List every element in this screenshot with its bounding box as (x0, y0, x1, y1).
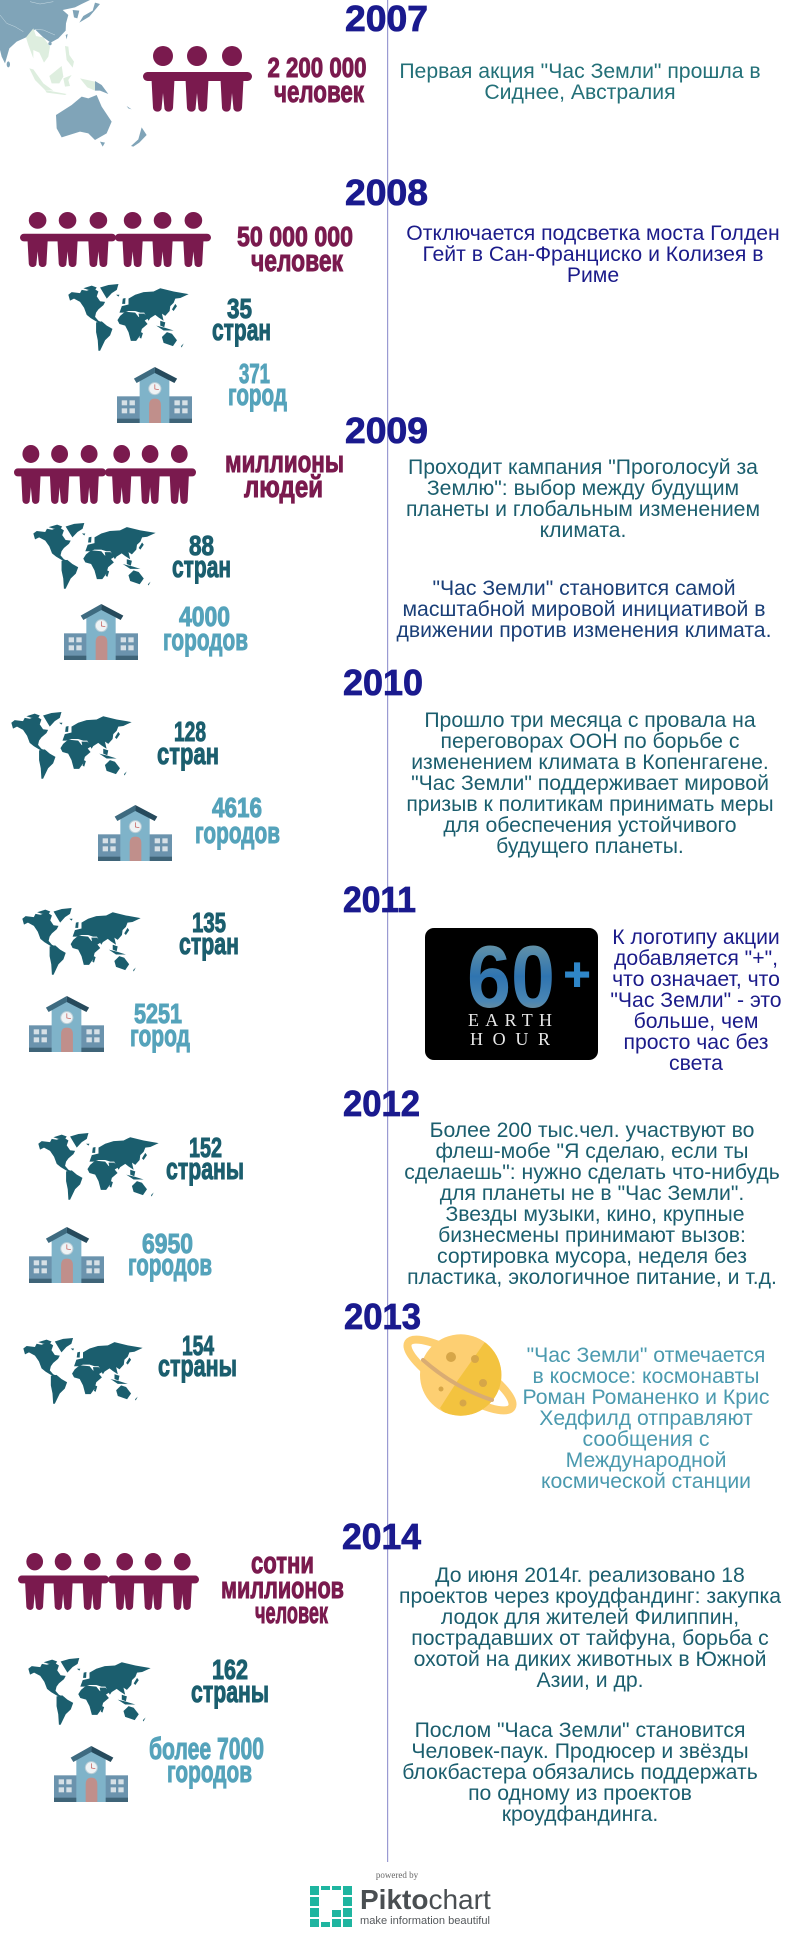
2013 section (23, 1296, 770, 1493)
countries 2013 (158, 1330, 237, 1383)
text 2011 (610, 926, 782, 1075)
text 2009 second (397, 577, 771, 642)
cities 2011 (130, 998, 190, 1053)
text 2013 (523, 1344, 770, 1493)
cities 2014: более 7000 (149, 1731, 264, 1766)
text 2012: бизнесмены принимают вызов: (438, 1224, 746, 1247)
text 2009 first (406, 456, 760, 542)
map of Asia-Pacific (0, 0, 147, 147)
countries 2009: 88 (189, 530, 214, 561)
countries 2008: 35 (227, 293, 252, 324)
year 2009: 2009 (345, 410, 428, 451)
people count 2014 (221, 1545, 344, 1630)
text 2012: Звезды музыки, кино, крупные (445, 1203, 745, 1226)
cities 2012: городов (128, 1247, 212, 1282)
text 2014 second: Человек-паук. Продюсер и звёзды (411, 1740, 749, 1763)
cities 2012: 6950 (142, 1228, 193, 1259)
cities 2008 (228, 358, 287, 412)
cities 2010: городов (195, 815, 280, 850)
text 2011: "Час Земли" - это (610, 989, 782, 1012)
powered by: powered by (376, 1870, 419, 1880)
text 2008: Гейт в Сан-Франциско и Колизея в (422, 243, 764, 266)
people count 2008: человек (251, 243, 343, 278)
countries 2011 (179, 907, 239, 961)
text 2011: больше, чем (634, 1010, 758, 1033)
year 2013: 2013 (344, 1296, 421, 1337)
cities 2011: 5251 (134, 998, 182, 1029)
text 2007 (399, 60, 761, 104)
text 2014 first: пострадавших от тайфуна, борьба с (411, 1627, 769, 1650)
year 2011: 2011 (343, 879, 416, 920)
text 2012: для планеты не в "Час Земли". (440, 1182, 744, 1205)
countries 2008 (212, 293, 271, 347)
countries 2011: 135 (192, 907, 226, 938)
text 2014 second: блокбастера обязались поддержать (402, 1761, 758, 1784)
text 2009 first: Проходит кампания "Проголосуй за (408, 456, 758, 479)
Earth Hour 60+ logo: HOUR (470, 1029, 550, 1049)
people count 2008 (237, 221, 353, 278)
text 2008: Отключается подсветка моста Голден (406, 222, 780, 245)
text 2014 second: по одному из проектов (468, 1782, 692, 1805)
people count 2007: человек (274, 74, 364, 109)
icon: world map (68, 284, 189, 351)
Piktochart footer (310, 1870, 491, 1927)
text 2010: Прошло три месяца с провала на (424, 709, 756, 732)
text 2009 second: масштабной мировой инициативой в (402, 598, 766, 621)
text 2013: Международной (566, 1449, 726, 1472)
text 2009 first: климата. (540, 519, 626, 542)
text 2007: Первая акция "Час Земли" прошла в (399, 60, 761, 83)
timeline line (387, 0, 388, 1862)
cities 2014 (149, 1731, 264, 1789)
text 2007: Сиднее, Австралия (484, 81, 676, 104)
text 2010: изменением климата в Копенгагене. (411, 751, 769, 774)
text 2010 (406, 709, 774, 858)
text 2013: Хедфилд отправляют (539, 1407, 753, 1430)
icon: building (29, 1227, 104, 1283)
icon: world map (38, 1133, 159, 1200)
text 2012: флеш-мобе "Я сделаю, если ты (435, 1140, 749, 1163)
people count 2009: миллионы (225, 444, 344, 479)
countries 2009: стран (172, 549, 231, 584)
text 2010: призыв к политикам принимать меры (406, 793, 774, 816)
text 2014 second: кроудфандинга. (502, 1803, 658, 1826)
countries 2012 (166, 1132, 244, 1186)
tagline: make information beautiful (360, 1915, 490, 1927)
2008 section (20, 172, 780, 423)
Earth Hour 60+ logo: EARTH (468, 1010, 552, 1030)
people count 2014: миллионов (221, 1570, 344, 1605)
text 2014 first: лодок для жителей Филиппин, (441, 1606, 739, 1629)
people count 2014: человек (255, 1595, 328, 1630)
icon: world map (22, 908, 141, 975)
icon: people group (18, 1553, 199, 1610)
text 2011: просто час без (623, 1031, 769, 1054)
text 2013: "Час Земли" отмечается (527, 1344, 765, 1367)
text 2014 second (402, 1719, 758, 1826)
text 2009 second: движении против изменения климата. (397, 619, 771, 642)
countries 2010: 128 (174, 716, 206, 747)
icon: building (54, 1746, 128, 1802)
countries 2014: страны (191, 1674, 269, 1709)
text 2013: космической станции (541, 1470, 751, 1493)
icon: world map (11, 712, 132, 779)
text 2008: Риме (567, 264, 619, 287)
countries 2011: стран (179, 926, 239, 961)
year 2014: 2014 (342, 1516, 421, 1557)
text 2014 first (399, 1564, 781, 1692)
countries 2013: 154 (182, 1330, 214, 1361)
text 2009 first: планеты и глобальным изменением (406, 498, 760, 521)
countries 2009 (172, 530, 231, 584)
people count 2009 (225, 444, 344, 504)
text 2012: Более 200 тыс.чел. участвуют во (430, 1119, 754, 1142)
text 2013: сообщения с (582, 1428, 710, 1451)
text 2010: "Час Земли" поддерживает мировой (411, 772, 769, 795)
Earth Hour 60+ logo: + (564, 948, 590, 1000)
people count 2008: 50 000 000 (237, 221, 353, 252)
text 2011: К логотипу акции (612, 926, 780, 949)
countries 2013: страны (158, 1348, 237, 1383)
text 2008 (406, 222, 780, 287)
cities 2011: город (130, 1018, 190, 1053)
year 2008: 2008 (345, 172, 428, 213)
cities 2009: 4000 (179, 601, 230, 632)
year 2012: 2012 (343, 1083, 420, 1124)
cities 2014: городов (167, 1754, 252, 1789)
text 2010: будущего планеты. (496, 835, 684, 858)
text 2012: сделаешь": нужно сделать что-нибудь (404, 1161, 780, 1184)
icon: world map (28, 1658, 151, 1725)
text 2009 second: "Час Земли" становится самой (432, 577, 736, 600)
Piktochart wordmark: Piktochart (360, 1884, 491, 1915)
text 2014 first: Азии, и др. (536, 1669, 644, 1692)
text 2013: в космосе: космонавты (533, 1365, 759, 1388)
people count 2009: людей (244, 469, 323, 504)
text 2011: света (669, 1052, 723, 1075)
cities 2012 (128, 1228, 212, 1282)
icon: people (143, 46, 252, 112)
countries 2010: стран (157, 736, 219, 771)
Earth Hour 60+ logo: 60 (467, 927, 555, 1026)
text 2012 (404, 1119, 780, 1289)
text 2014 first: До июня 2014г. реализовано 18 (435, 1564, 745, 1587)
countries 2008: стран (212, 312, 271, 347)
icon: people group (14, 445, 196, 504)
2010 section (11, 662, 774, 861)
cities 2010: 4616 (212, 792, 262, 823)
people count 2014: сотни (251, 1545, 314, 1580)
2011 section (22, 879, 782, 1075)
text 2012: сортировка мусора, неделя без (437, 1245, 747, 1268)
icon: people group (20, 212, 211, 267)
people count 2007: 2 200 000 (268, 52, 366, 83)
text 2014 second: Послом "Часа Земли" становится (415, 1719, 745, 1742)
2009 section (14, 410, 771, 660)
icon: planet (403, 1334, 517, 1416)
text 2011: что означает, что (612, 968, 780, 991)
text 2014 first: охотой на диких животных в Южной (414, 1648, 766, 1671)
year 2010: 2010 (343, 662, 423, 703)
icon: world map (23, 1338, 143, 1404)
cities 2008: город (228, 377, 287, 412)
countries 2014: 162 (212, 1654, 248, 1685)
text 2013: Роман Романенко и Крис (523, 1386, 770, 1409)
countries 2012: страны (166, 1151, 244, 1186)
text 2009 first: Землю": выбор между будущим (427, 477, 739, 500)
icon: building (98, 805, 172, 861)
2007 section (143, 0, 761, 112)
icon: building (117, 367, 192, 423)
people count 2007 (268, 52, 366, 109)
Earth Hour 60+ logo (425, 927, 598, 1060)
cities 2009: городов (163, 622, 248, 657)
icon: building (29, 996, 104, 1052)
icon: Piktochart logo (310, 1886, 352, 1927)
countries 2012: 152 (189, 1132, 222, 1163)
text 2014 first: проектов через кроудфандинг: закупка (399, 1585, 781, 1608)
cities 2008: 371 (239, 358, 270, 389)
icon: building (64, 604, 138, 660)
cities 2010 (195, 792, 280, 850)
text 2011: добавляется "+", (614, 947, 778, 970)
cities 2009 (163, 601, 248, 657)
icon: world map (33, 523, 156, 589)
text 2012: пластика, экологичное питание, и т.д. (407, 1266, 777, 1289)
text 2010: переговорах ООН по борьбе с (441, 730, 740, 753)
countries 2014 (191, 1654, 269, 1709)
2012 section (29, 1083, 780, 1289)
countries 2010 (157, 716, 219, 771)
2014 section (18, 1516, 781, 1826)
text 2010: для обеспечения устойчивого (443, 814, 737, 837)
